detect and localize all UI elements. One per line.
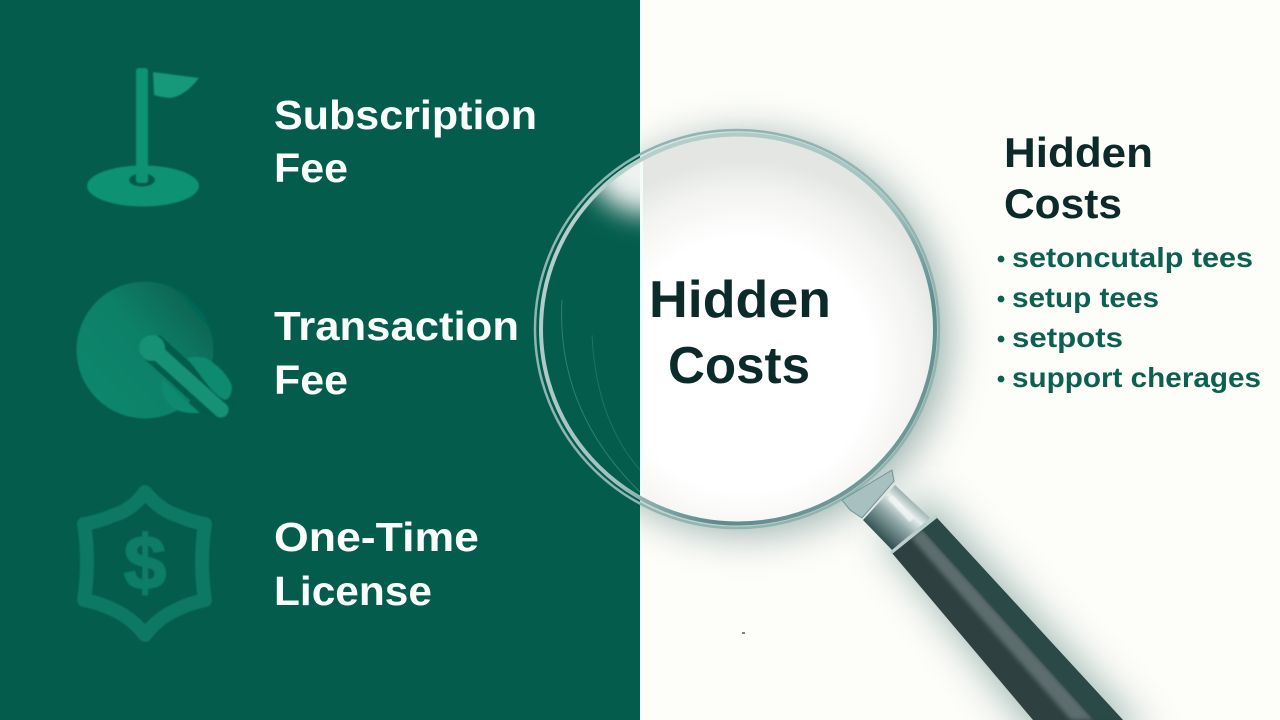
list: hidden cost items: support cherages xyxy=(1012,362,1261,393)
list: hidden cost items xyxy=(998,242,1261,393)
icon: dollar badge: $ xyxy=(124,521,166,606)
lens rim xyxy=(535,130,939,528)
magnifier ferrule xyxy=(842,470,937,553)
heading: hidden costs right: Costs xyxy=(1004,180,1122,227)
text: transaction fee xyxy=(274,303,519,403)
magnifier xyxy=(530,120,1140,720)
shadow: magnifier glow xyxy=(543,135,1150,720)
text: one-time license: License xyxy=(274,568,432,614)
list: hidden cost items: setoncutalp tees xyxy=(1012,242,1253,273)
lens interior xyxy=(561,136,933,522)
text: subscription fee xyxy=(274,92,537,191)
text: one-time license xyxy=(274,514,479,614)
list: hidden cost items: setup tees xyxy=(1012,282,1159,313)
icon: golf flag xyxy=(87,68,199,206)
heading: hidden costs in lens xyxy=(649,271,831,395)
panel: right light background xyxy=(640,0,1280,720)
panel: left green background xyxy=(0,0,640,720)
heading: hidden costs in lens: Hidden xyxy=(649,271,831,329)
text: transaction fee: Transaction xyxy=(274,303,519,349)
list: hidden cost items: setpots xyxy=(1012,322,1123,353)
heading: hidden costs in lens: Costs xyxy=(668,337,810,395)
icon: disc with slashed tool xyxy=(76,282,232,418)
icon: dollar badge xyxy=(84,492,205,635)
heading: hidden costs right: Hidden xyxy=(1004,129,1153,176)
text: subscription fee: Fee xyxy=(274,145,348,191)
text: subscription fee: Subscription xyxy=(274,92,537,138)
magnifier handle xyxy=(892,518,1123,720)
text: transaction fee: Fee xyxy=(274,357,348,403)
text: one-time license: One-Time xyxy=(274,514,479,560)
heading: hidden costs right xyxy=(1004,129,1153,227)
